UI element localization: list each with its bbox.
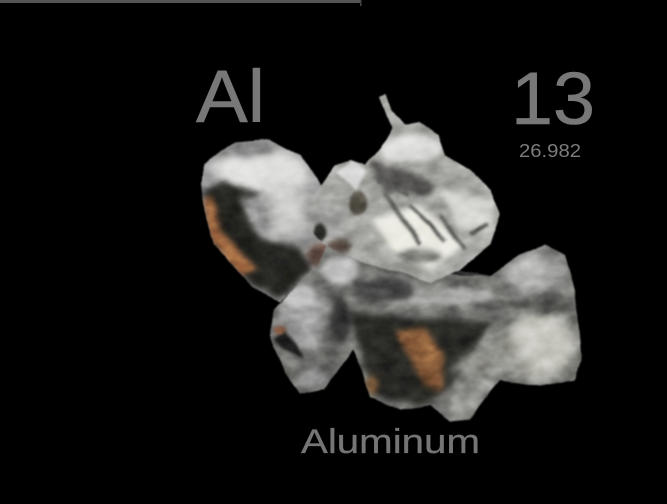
metal nugget: bottom right mass bbox=[269, 244, 583, 422]
metal nugget: left lump bbox=[200, 138, 326, 303]
atomic mass: 26.982 bbox=[519, 141, 581, 161]
element symbol: Al bbox=[196, 55, 265, 138]
top edge line bbox=[0, 0, 362, 6]
metal nugget bbox=[190, 90, 590, 430]
metal nugget: surface texture bbox=[190, 90, 590, 425]
element name: Aluminum bbox=[301, 423, 480, 461]
atomic number: 13 bbox=[511, 57, 595, 140]
illustration: aluminum element card bbox=[0, 0, 592, 454]
metal nugget: central crumpled piece bbox=[310, 94, 500, 284]
